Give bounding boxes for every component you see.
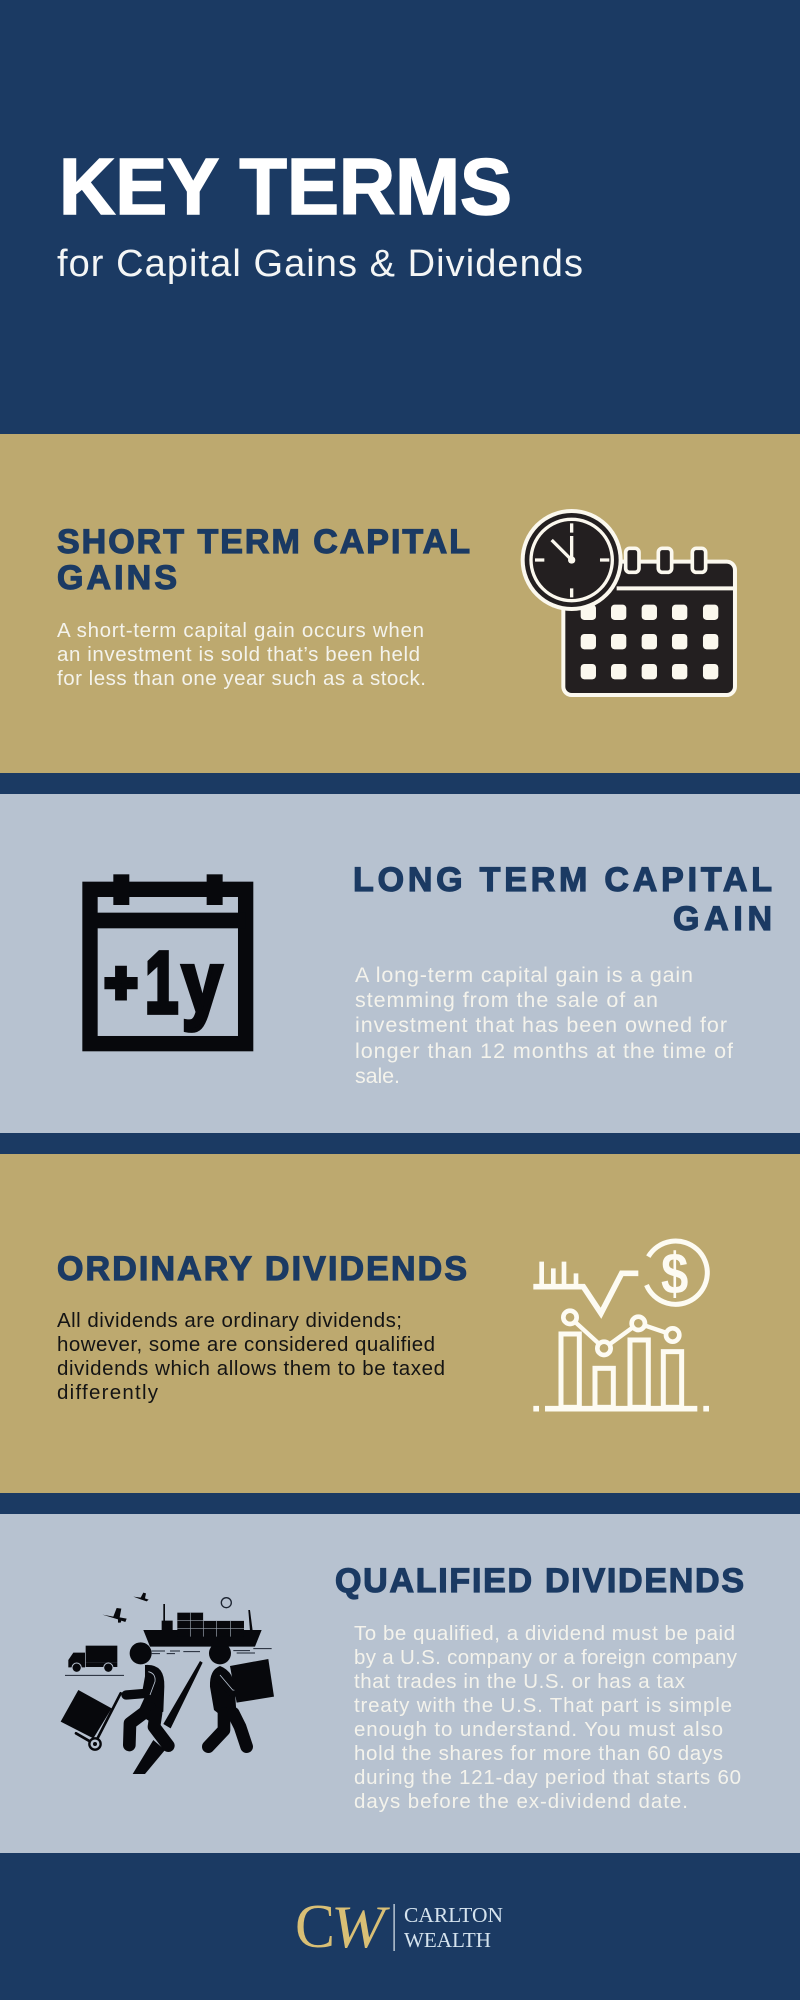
body text: A short-term capital gain occurs when xyxy=(57,619,424,642)
heading: QUALIFIED DIVIDENDS xyxy=(335,1562,744,1600)
body text: hold the shares for more than 60 days xyxy=(354,1742,723,1765)
body text: differently xyxy=(57,1381,159,1404)
logo: Carlton Wealth: C xyxy=(295,1893,335,1961)
heading: LONG TERM CAPITAL xyxy=(353,861,772,899)
icon: calendar plus one year: 1 xyxy=(145,934,178,1032)
title: KEY TERMS xyxy=(59,142,512,231)
body text: days before the ex-dividend date. xyxy=(354,1790,688,1813)
panel: qualified dividends xyxy=(0,1514,800,1853)
body text: by a U.S. company or a foreign company xyxy=(354,1646,738,1669)
panel: ordinary dividends xyxy=(0,1154,800,1493)
logo: Carlton Wealth xyxy=(295,1893,503,1961)
icon: calendar plus one year: + xyxy=(105,952,137,1015)
body text: treaty with the U.S. That part is simple xyxy=(354,1694,732,1717)
panel: footer xyxy=(0,1853,800,2000)
body text xyxy=(355,963,733,1088)
heading xyxy=(353,861,772,938)
body text: All dividends are ordinary dividends; xyxy=(57,1309,402,1332)
heading: GAIN xyxy=(673,900,772,938)
panel: short term capital gains xyxy=(0,434,800,773)
body text: A long-term capital gain is a gain xyxy=(355,963,693,987)
heading: ORDINARY DIVIDENDS xyxy=(57,1250,467,1288)
body text: sale. xyxy=(355,1064,400,1088)
heading xyxy=(57,523,470,597)
body text: during the 121-day period that starts 60 xyxy=(354,1766,741,1789)
body text: longer than 12 months at the time of xyxy=(355,1039,733,1063)
body text xyxy=(57,1309,445,1404)
panel: long term capital gain xyxy=(0,794,800,1133)
subtitle: for Capital Gains & Dividends xyxy=(57,243,583,285)
logo: Carlton Wealth: W xyxy=(331,1894,390,1960)
body text xyxy=(354,1622,741,1813)
body text: however, some are considered qualified xyxy=(57,1333,435,1356)
heading: GAINS xyxy=(57,559,177,597)
icon: logistics workers xyxy=(61,1593,274,1774)
panel: header xyxy=(0,0,800,434)
icon: calendar plus one year: y xyxy=(182,934,222,1032)
body text: an investment is sold that’s been held xyxy=(57,643,420,666)
body text: enough to understand. You must also xyxy=(354,1718,723,1741)
logo: Carlton Wealth: WEALTH xyxy=(404,1928,491,1952)
icon: bar chart with dollar: $ xyxy=(661,1241,688,1306)
body text: that trades in the U.S. or has a tax xyxy=(354,1670,686,1693)
icon: bar chart with dollar xyxy=(533,1241,709,1409)
body text: investment that has been owned for xyxy=(355,1013,727,1037)
icon: calendar plus one year xyxy=(90,874,246,1044)
heading: SHORT TERM CAPITAL xyxy=(57,523,470,561)
logo: Carlton Wealth: CARLTON xyxy=(404,1903,503,1927)
body text: stemming from the sale of an xyxy=(355,988,658,1012)
body text: for less than one year such as a stock. xyxy=(57,667,426,690)
body text xyxy=(57,619,426,690)
icon: clock and calendar xyxy=(521,509,735,695)
body text: To be qualified, a dividend must be paid xyxy=(354,1622,735,1645)
body text: dividends which allows them to be taxed xyxy=(57,1357,445,1380)
